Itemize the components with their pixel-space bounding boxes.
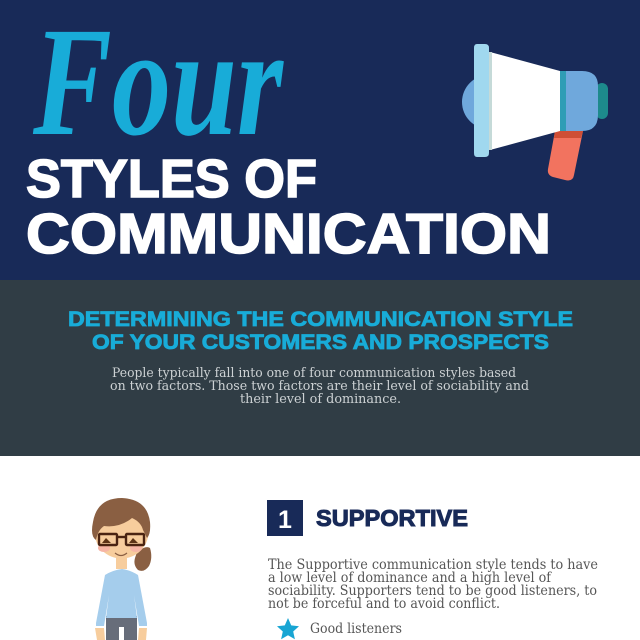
text: intro paragraph: their level of dominance. [240,392,401,407]
text: supportive paragraph: not be forceful and to avoid conflict. [268,596,500,612]
text: intro paragraph: People typically fall into one of four communication styles based [112,366,516,381]
panel: intro [0,280,640,456]
heading: determining: DETERMINING THE COMMUNICATION STYLE [68,308,573,331]
title: styles of: STYLES OF [26,149,317,209]
text: supportive paragraph: a low level of dominance and a high level of [268,570,553,586]
heading: supportive: SUPPORTIVE [316,505,468,531]
icon: megaphone [462,44,608,180]
illustration: woman with glasses [92,498,151,640]
text: good listeners: Good listeners [310,621,402,637]
text: intro paragraph: on two factors. Those two factors are their level of sociability and [110,379,529,394]
panel: header [0,0,640,280]
badge: number 1: 1 [278,506,292,534]
panel: supportive [92,498,598,640]
heading: determining [68,308,573,354]
title: communication: COMMUNICATION [26,202,551,266]
icon: star [277,618,299,639]
text: supportive paragraph [268,557,598,612]
heading: determining: OF YOUR CUSTOMERS AND PROSPECTS [92,331,549,354]
badge: number 1 [267,500,303,536]
title: Four: Four [32,0,284,168]
text: intro paragraph [110,366,529,407]
text: supportive paragraph: The Supportive communication style tends to have [268,557,598,573]
text: supportive paragraph: sociability. Supporters tend to be good listeners, to [268,583,597,599]
